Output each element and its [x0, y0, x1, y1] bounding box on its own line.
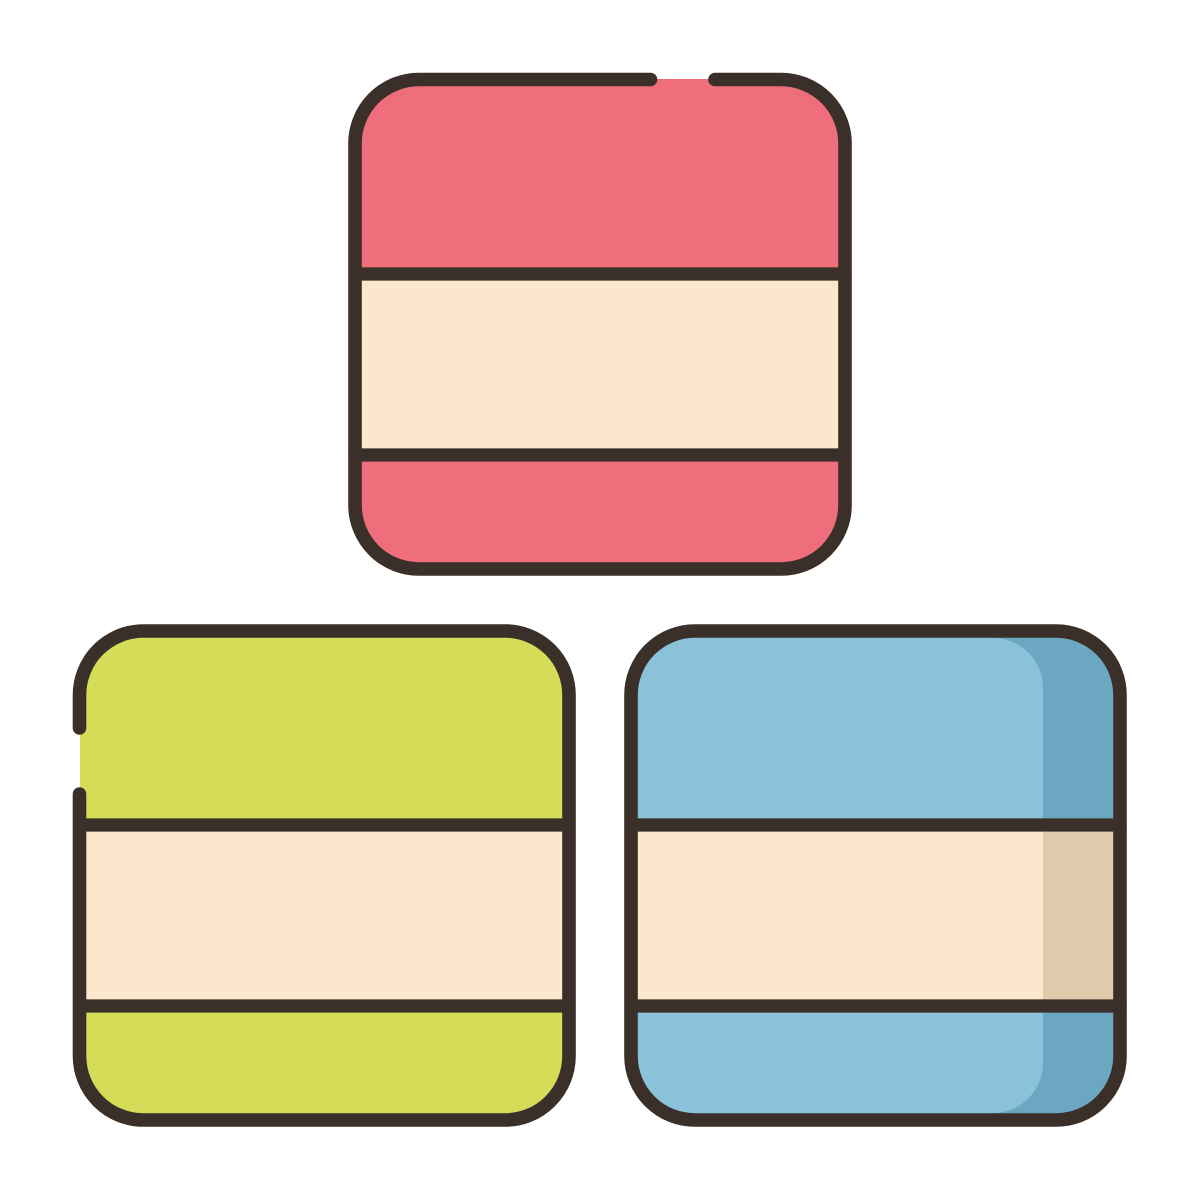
- block: bottom left green: [80, 631, 569, 1120]
- block: bottom right blue: [631, 631, 1120, 1120]
- block: top red: [355, 79, 845, 569]
